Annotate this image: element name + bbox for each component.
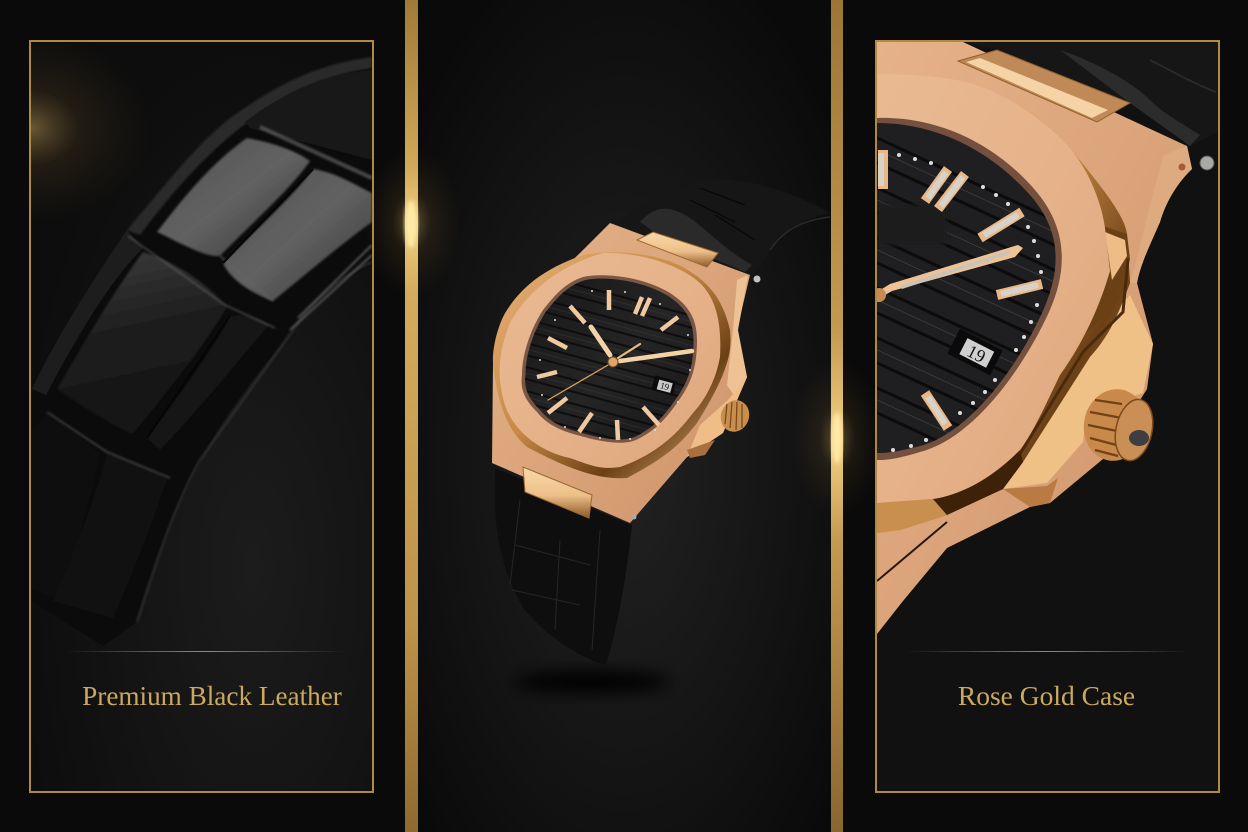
crown closeup [1084,389,1154,462]
screw bars [754,276,760,282]
case lower groove [877,522,947,581]
lug screw [1200,156,1214,170]
side polished piece [1003,295,1153,489]
dial rim closeup [877,118,1062,460]
leather strap closeup [30,57,372,646]
frame: left gold border [30,41,373,792]
watch drop shadow [514,671,670,693]
date window: 19 [659,380,671,392]
dial closeup [877,123,1056,453]
case closeup [877,42,1192,634]
strap closeup [963,42,1218,146]
upper strap [612,179,830,278]
panel: full watch [442,92,830,824]
minute dots closeup [891,153,1043,452]
rose gold bezel closeup [877,74,1130,533]
divider line: right caption [905,651,1190,652]
dial stripes closeup [877,136,1055,441]
bottom lug bar [523,467,592,518]
strap cell: middle right [147,315,270,450]
lower strap [495,468,632,665]
crown [716,396,754,436]
brushed bezel [500,253,720,468]
top lug bar [637,232,718,267]
minute dots [539,290,691,440]
gold bar: right divider [792,0,882,832]
brushed bezel closeup [877,74,1110,503]
hour markers closeup [883,150,1042,428]
date window [651,375,676,396]
date window closeup: 19 [964,341,989,367]
dial rim [522,275,697,443]
hour markers [537,290,678,440]
glow: frame light flare [31,58,120,198]
polished bezel edge [493,252,731,478]
dial [525,278,694,440]
frame: right gold border [876,41,1219,792]
caption: rose gold case: Rose Gold Case [958,680,1135,711]
strap cell: lower left [32,414,100,600]
top lug bar closeup [958,50,1130,122]
gold bar: left divider [364,0,460,832]
strap cell: upper right [223,169,372,301]
strap cell: lower right [53,454,167,618]
date window closeup [947,329,1003,375]
watch case [492,223,750,523]
dial stripes [525,284,694,440]
strap cell: middle left [57,252,227,434]
polished dark facets [1083,226,1130,336]
divider line: left caption [65,651,345,652]
panel: premium black leather [0,33,373,792]
strap cell: upper left [157,138,310,256]
watch hands [548,327,692,400]
minute hand closeup [877,245,1023,298]
panel: rose gold case [860,41,1219,792]
caption: premium black leather: Premium Black Leather [82,681,342,711]
